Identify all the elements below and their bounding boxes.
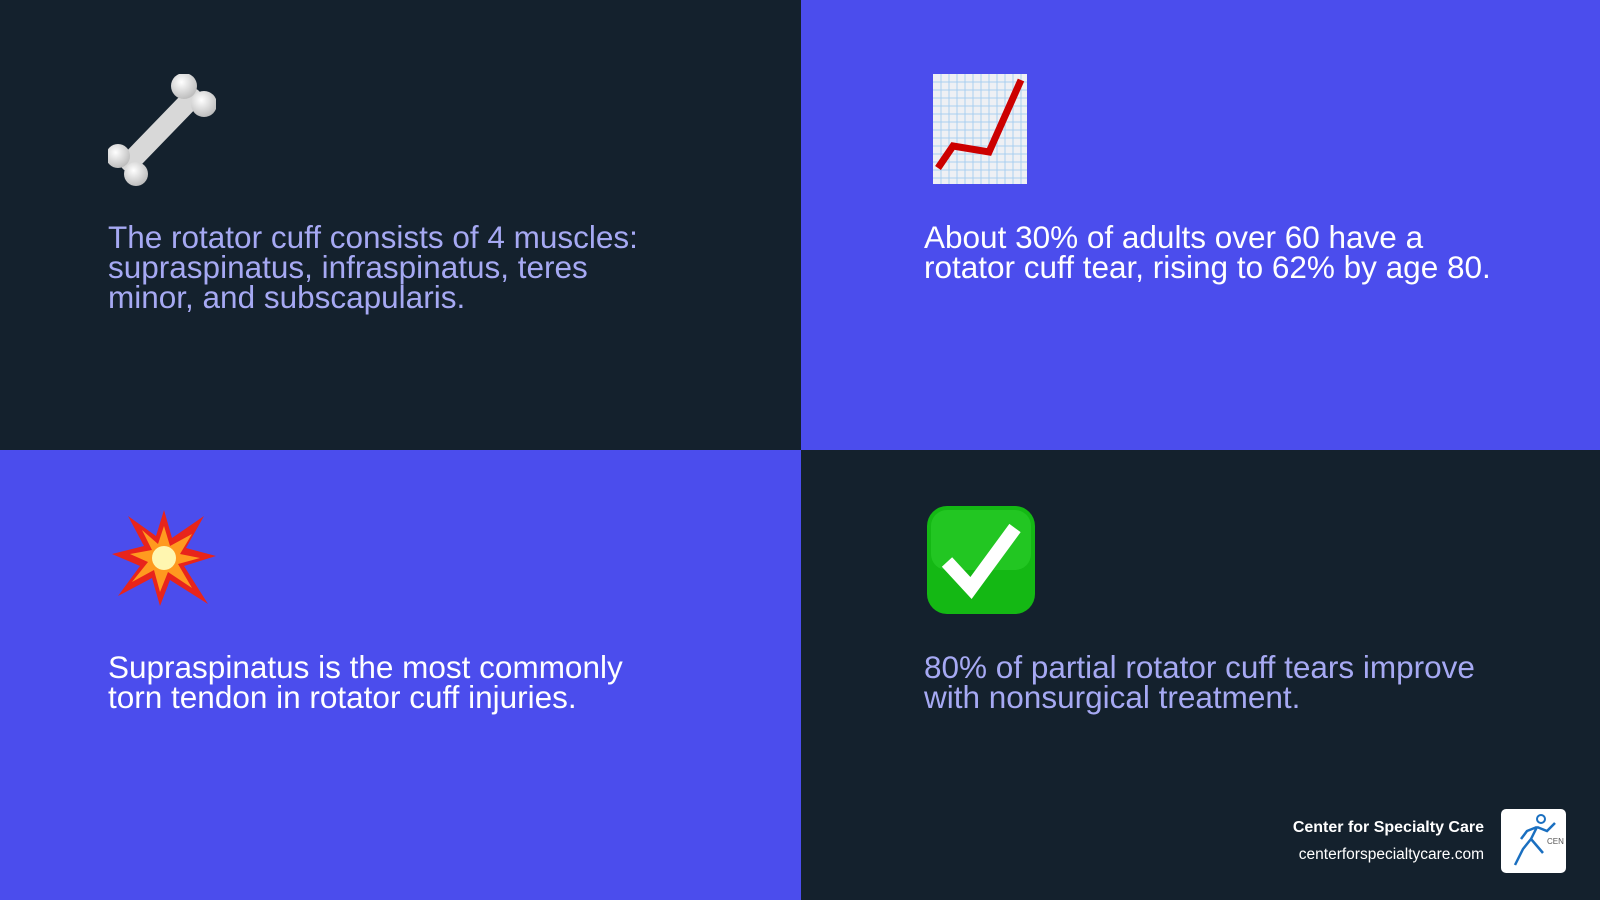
text: supraspinatus: torn tendon in rotator cuff injuries. bbox=[108, 679, 577, 715]
icon: check bbox=[927, 506, 1035, 614]
panel: treatment bbox=[801, 450, 1600, 900]
panel: prevalence bbox=[801, 0, 1600, 450]
panel: supraspinatus bbox=[0, 450, 801, 900]
logo icon: CEN bbox=[1547, 837, 1564, 846]
text: muscles: minor, and subscapularis. bbox=[108, 279, 465, 315]
text: muscles: The rotator cuff consists of 4 muscles: bbox=[108, 219, 638, 255]
text: prevalence bbox=[924, 219, 1491, 285]
text: prevalence: About 30% of adults over 60 have a bbox=[924, 219, 1423, 255]
text: muscles: supraspinatus, infraspinatus, teres bbox=[108, 249, 588, 285]
website: centerforspecialtycare.com bbox=[1299, 846, 1484, 863]
company name: Center for Specialty Care bbox=[1293, 819, 1484, 836]
panel: muscles bbox=[0, 0, 801, 450]
text: supraspinatus bbox=[108, 649, 623, 715]
icon: collision bbox=[112, 510, 216, 606]
logo icon bbox=[1501, 809, 1566, 873]
text: supraspinatus: Supraspinatus is the most commonly bbox=[108, 649, 623, 685]
text: treatment: with nonsurgical treatment. bbox=[924, 679, 1300, 715]
text: muscles bbox=[108, 219, 638, 315]
text: treatment: 80% of partial rotator cuff tears improve bbox=[924, 649, 1475, 685]
logo block bbox=[1293, 809, 1566, 873]
text: treatment bbox=[924, 649, 1475, 715]
icon: bone bbox=[108, 74, 216, 186]
text: prevalence: rotator cuff tear, rising to 62% by age 80. bbox=[924, 249, 1491, 285]
icon: chart bbox=[933, 74, 1027, 184]
